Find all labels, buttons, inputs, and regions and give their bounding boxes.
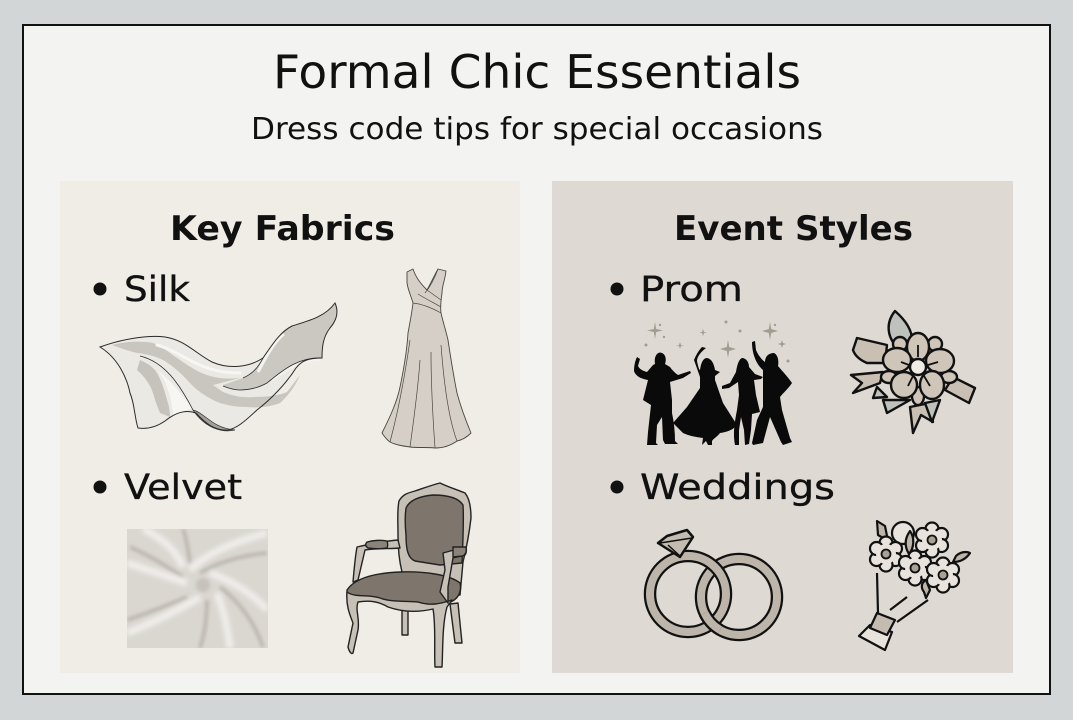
dancer: gown woman	[673, 347, 737, 445]
title: Formal Chic Essentials	[273, 45, 801, 99]
icon: evening gown	[382, 269, 471, 448]
bullet: silk: Silk	[124, 270, 191, 310]
subtitle: Dress code tips for special occasions	[251, 112, 823, 147]
icon: silk scarf	[100, 303, 337, 431]
bullet: weddings: Weddings	[640, 468, 835, 508]
heading: key fabrics: Key Fabrics	[170, 209, 395, 249]
panel: event styles	[552, 181, 1013, 673]
icon: wedding rings	[650, 530, 777, 635]
dancer: man left	[634, 352, 691, 445]
bullet: prom: Prom	[640, 270, 743, 310]
icon: bouquet	[859, 521, 970, 650]
sparkles	[644, 320, 790, 362]
icon: corsage flower	[851, 311, 975, 433]
image: velvet swatch	[127, 529, 268, 648]
bullet: prom	[610, 270, 743, 310]
dancer: man right	[752, 341, 792, 445]
heading: event styles: Event Styles	[674, 209, 913, 249]
dancer: short dress woman	[722, 358, 763, 445]
bullet: silk	[94, 270, 191, 310]
bullet: velvet: Velvet	[124, 468, 242, 508]
panel: key fabrics	[60, 181, 520, 673]
icon: dancers silhouette	[634, 320, 792, 445]
icon: armchair	[347, 483, 471, 667]
